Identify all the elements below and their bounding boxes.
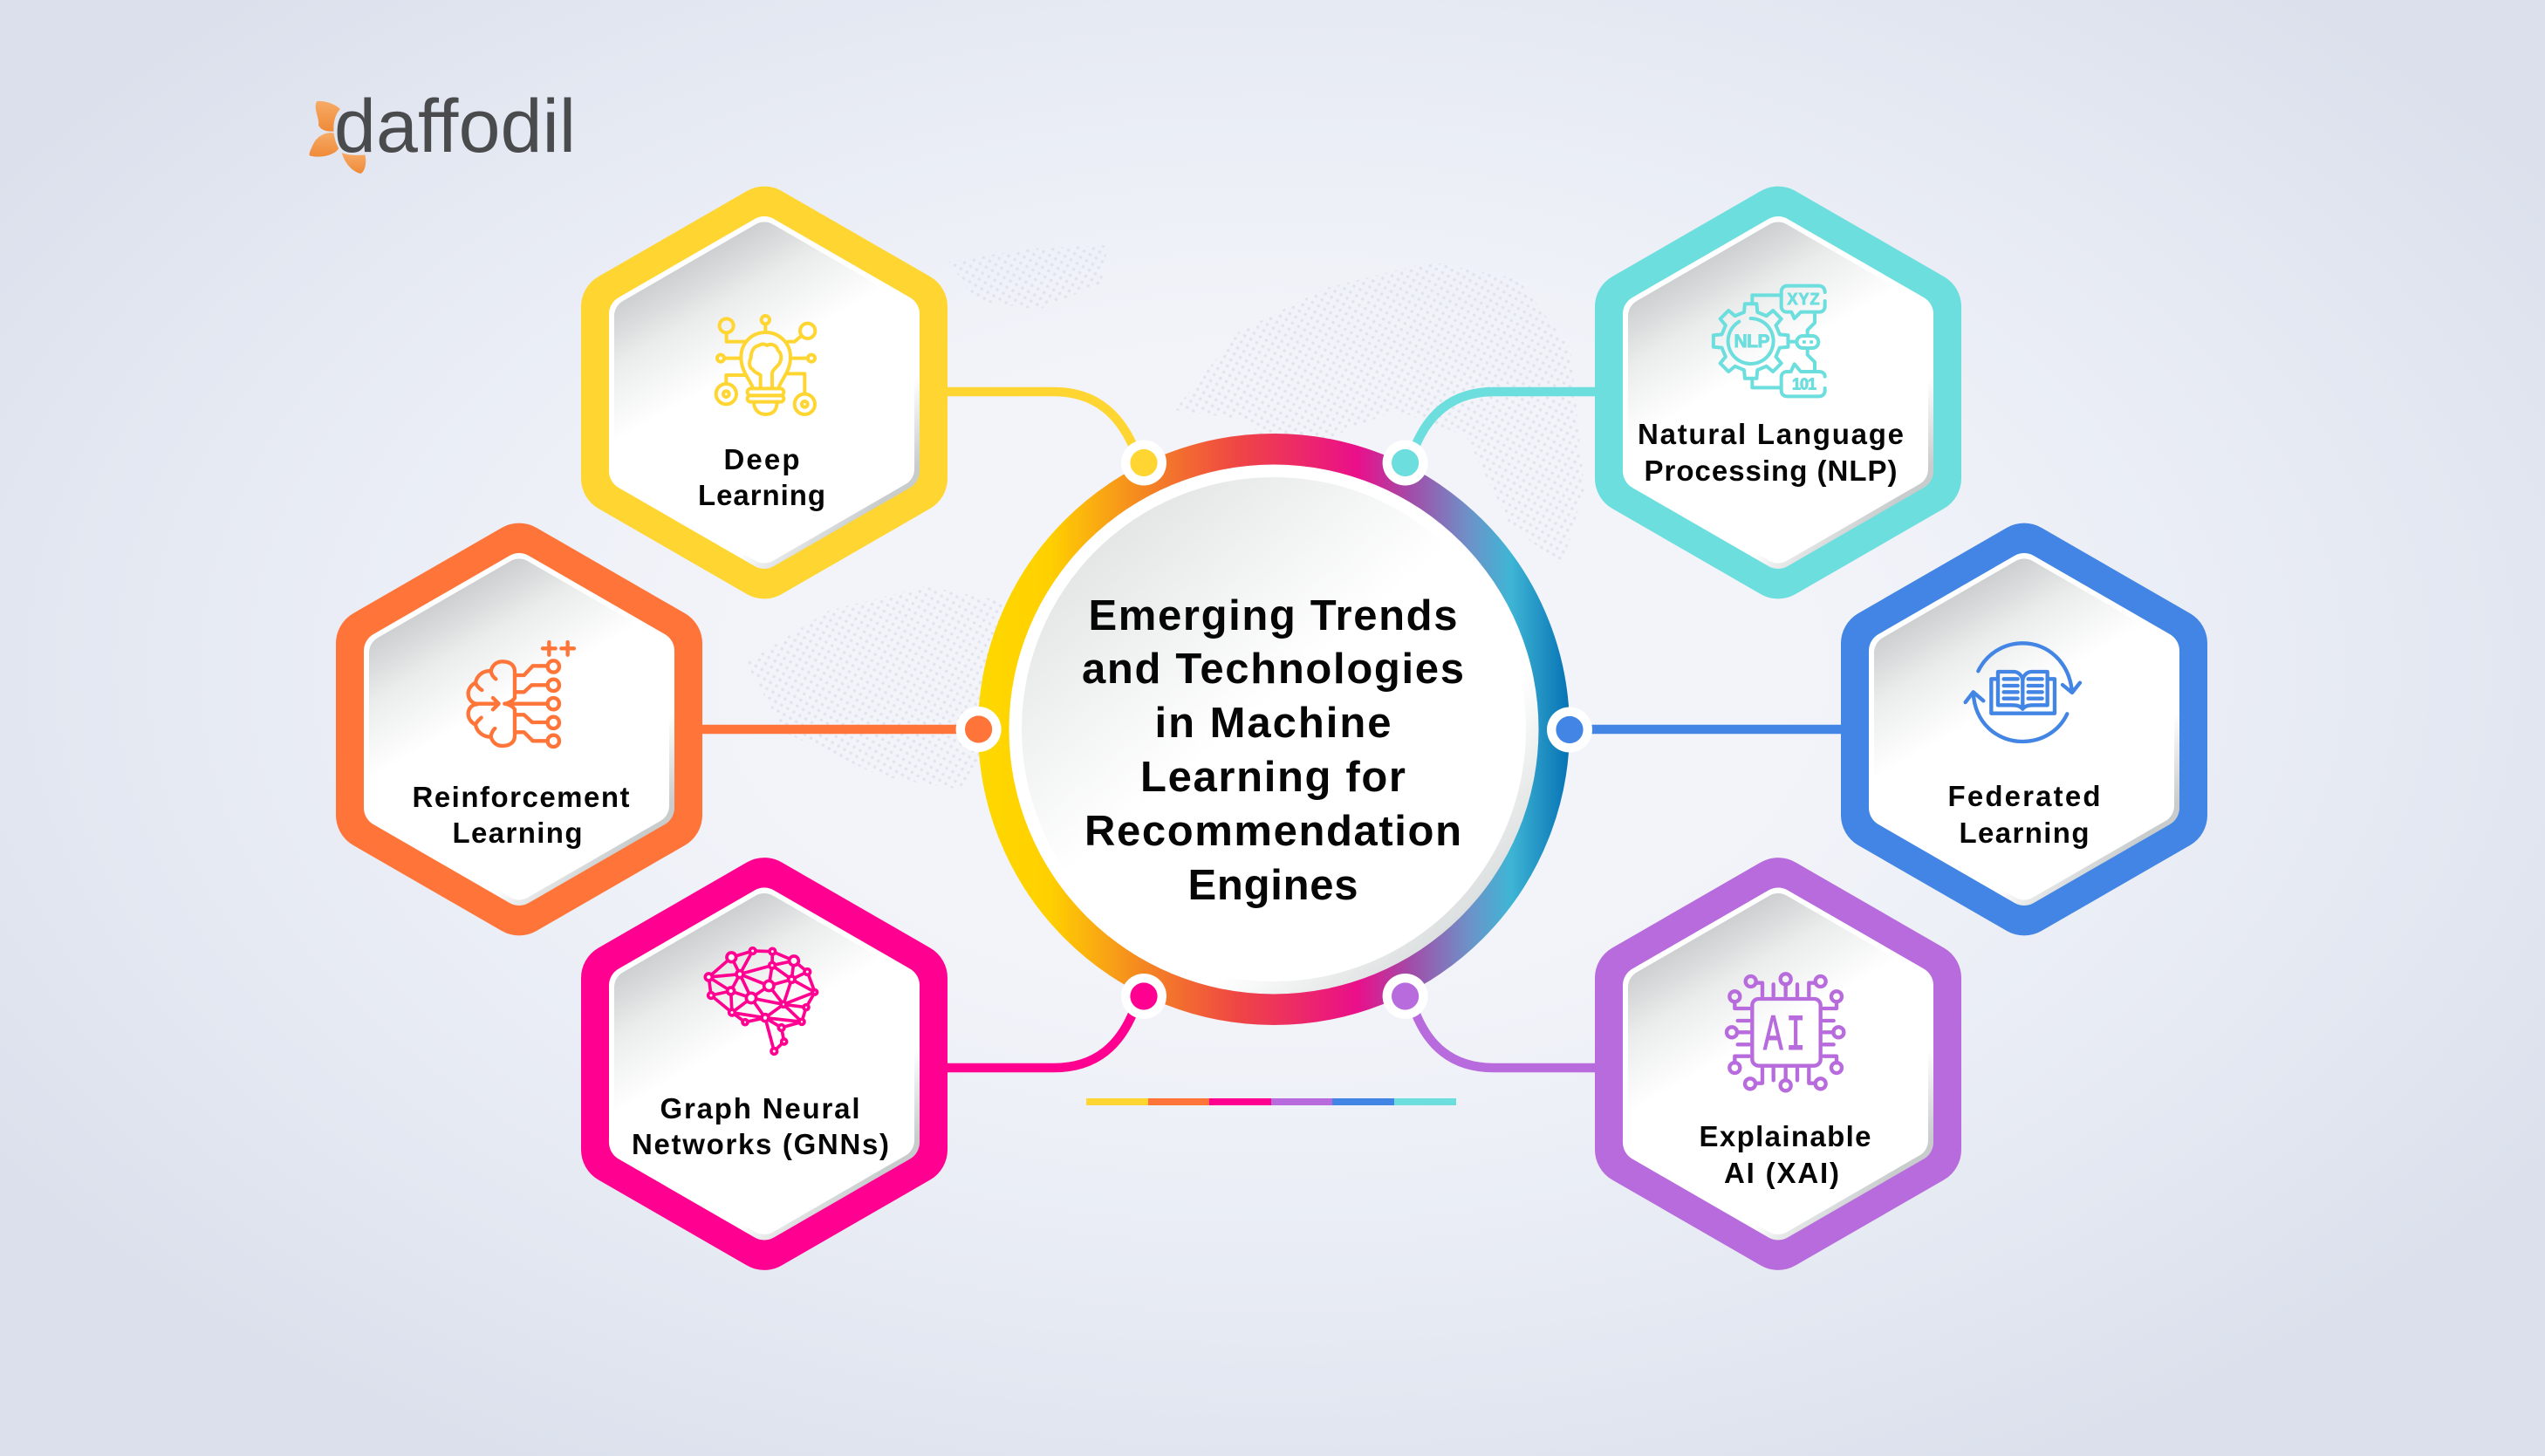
title: Learning for — [1140, 754, 1406, 801]
central gradient ring — [994, 449, 1554, 1009]
hexagon: Graph Neural Networks — [581, 858, 948, 1270]
logo wordmark: daffodil — [334, 85, 576, 168]
panel: Explainable AI — [1595, 858, 1961, 1270]
icon text: AI: AI — [1763, 1007, 1809, 1065]
label: Federated Learning: Learning — [1960, 817, 2089, 849]
label: Reinforcement Learning: Reinforcement — [412, 781, 630, 813]
colour bar — [1086, 1098, 1456, 1105]
background world map dots — [746, 245, 1584, 790]
label: Graph Neural Networks: Graph Neural — [660, 1092, 860, 1124]
icon: open book with cycle arrows — [1966, 643, 2080, 742]
connector dot: orange — [956, 707, 1002, 752]
label: Deep Learning — [698, 443, 825, 511]
label: Natural Language Processing: Processing (NLP) — [1644, 455, 1897, 487]
hexagon: Federated Learning — [1841, 523, 2207, 935]
icon: brain with circuit lines — [469, 642, 574, 747]
hexagon: Natural Language Processing — [1595, 187, 1961, 598]
label: Natural Language Processing: Natural Language — [1638, 418, 1904, 450]
label: Explainable AI: Explainable — [1700, 1120, 1871, 1152]
central disc — [1009, 464, 1539, 995]
title: Engines — [1188, 862, 1358, 909]
connector: Federated Learning — [1592, 725, 1841, 734]
logo mark: petals — [310, 101, 366, 174]
icon: light bulb with brain — [716, 316, 815, 414]
icon: network brain — [705, 948, 818, 1054]
connector dot: blue — [1547, 707, 1592, 752]
icon text: XYZ: XYZ — [1787, 291, 1820, 308]
title: and Technologies — [1082, 646, 1464, 693]
label: Deep Learning: Learning — [698, 479, 825, 511]
connector dot: teal — [1383, 440, 1428, 485]
panel: Graph Neural Networks — [581, 858, 948, 1270]
label: Deep Learning: Deep — [724, 443, 799, 475]
connector: Deep Learning — [948, 392, 1133, 447]
panel: Deep Learning — [581, 187, 948, 598]
connector: Reinforcement Learning — [702, 725, 960, 734]
label: Graph Neural Networks — [632, 1092, 889, 1160]
label: Federated Learning: Federated — [1947, 780, 2101, 812]
connector: Graph Neural Networks — [948, 1012, 1133, 1068]
label: Explainable AI: AI (XAI) — [1724, 1157, 1839, 1189]
label: Reinforcement Learning: Learning — [452, 817, 583, 849]
connector: Explainable AI — [1415, 1012, 1595, 1068]
connector dot: purple — [1383, 974, 1428, 1019]
panel: Reinforcement Learning — [336, 523, 702, 935]
icon text: NLP: NLP — [1734, 332, 1769, 352]
title — [1082, 592, 1464, 909]
panel: Federated Learning — [1841, 523, 2207, 935]
icon text: 101: 101 — [1792, 375, 1816, 393]
connector dot: yellow — [1121, 440, 1166, 485]
label: Graph Neural Networks: Networks (GNNs) — [632, 1128, 889, 1160]
title: Recommendation — [1084, 808, 1461, 855]
icon: AI chip — [1727, 974, 1844, 1090]
logo: daffodil — [310, 85, 576, 174]
title: Emerging Trends — [1089, 592, 1457, 639]
title: in Machine — [1155, 700, 1391, 747]
label: Explainable AI — [1700, 1120, 1871, 1189]
panel: Natural Language Processing — [1595, 187, 1961, 598]
hexagon: Explainable AI — [1595, 858, 1961, 1270]
label: Reinforcement Learning — [412, 781, 630, 849]
label: Federated Learning — [1947, 780, 2101, 849]
connector dot: pink — [1121, 974, 1166, 1019]
hexagon: Deep Learning — [581, 187, 948, 598]
label: Natural Language Processing — [1638, 418, 1904, 487]
icon: NLP gear with speech bubbles — [1714, 286, 1825, 396]
hexagon: Reinforcement Learning — [336, 523, 702, 935]
connector: Natural Language Processing — [1415, 392, 1595, 447]
